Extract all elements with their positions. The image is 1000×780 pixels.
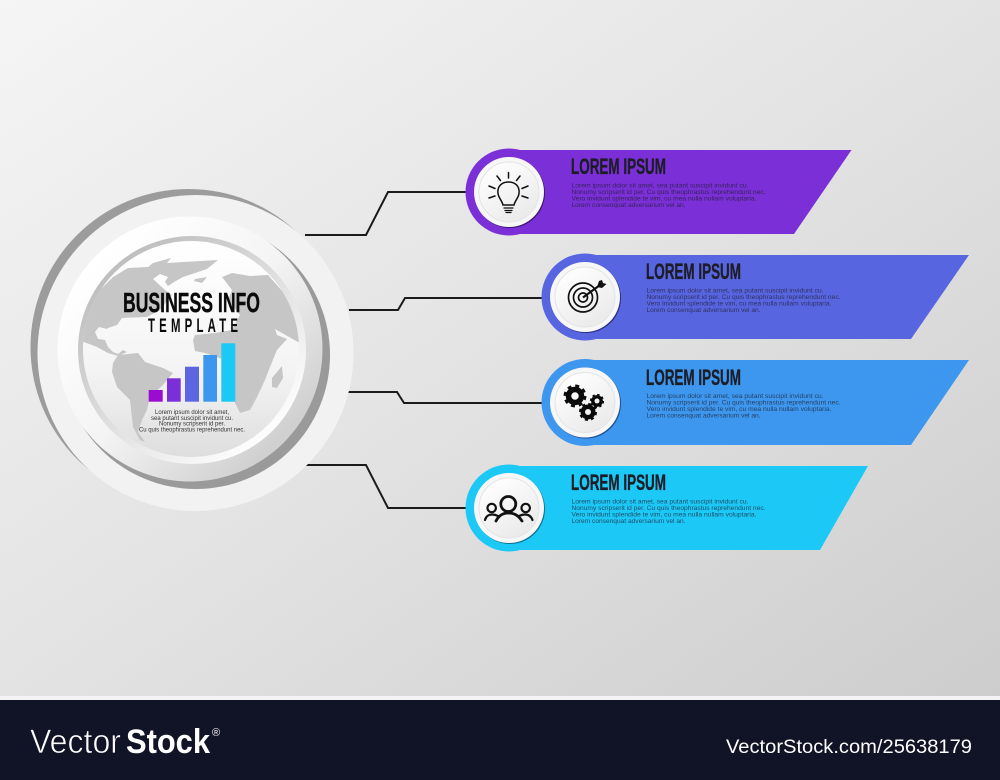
heading: business info: BUSINESS INFO — [123, 287, 260, 318]
globe description text: Lorem ipsum dolor sit amet, — [155, 409, 229, 416]
text block — [646, 288, 841, 314]
text block: Nonumy scripserit id per. Cu quis theophrastus reprehendunt nec. — [572, 189, 766, 196]
footer id: VectorStock.com/25638179 — [726, 737, 972, 758]
central globe badge — [30, 189, 354, 511]
panel: purple banner — [466, 148, 852, 236]
text block: Lorem consenquat adversarium vel an. — [572, 202, 686, 209]
text block: Nonumy scripserit id per. Cu quis theophrastus reprehendunt nec. — [646, 400, 841, 406]
text block — [572, 498, 766, 525]
text block: Vero invidunt splendide te vim, cu mea nulla nullam voluptaria. — [572, 196, 757, 202]
text block: Lorem consenquat adversarium vel an. — [646, 307, 761, 314]
heading: LOREM IPSUM — [571, 470, 666, 495]
logo: VectorStock — [30, 723, 220, 761]
text block — [572, 182, 766, 209]
heading: LOREM IPSUM — [646, 365, 741, 390]
text block: Lorem ipsum dolor sit amet, sea putant suscipit invidunt cu. — [572, 498, 749, 506]
icon: target — [568, 280, 606, 312]
logo: VectorStock: ® — [212, 727, 220, 739]
world map — [70, 258, 305, 442]
heading: LOREM IPSUM — [646, 259, 741, 284]
text block: Vero invidunt splendide te vim, cu mea nulla nullam voluptaria. — [646, 406, 832, 413]
logo: VectorStock: Stock — [126, 723, 210, 761]
globe description text: Cu quis theophrastus reprehendunt nec. — [139, 426, 245, 433]
icon: light bulb — [489, 172, 528, 212]
text block: Nonumy scripserit id per. Cu quis theophrastus reprehendunt nec. — [646, 294, 841, 301]
logo: VectorStock: Vector — [30, 723, 121, 761]
bar chart — [149, 343, 235, 402]
text block: Lorem consenquat adversarium vel an. — [646, 412, 761, 420]
text block: Vero invidunt splendide te vim, cu mea nulla nullam voluptaria. — [646, 300, 832, 308]
panel: cyan banner — [466, 464, 868, 552]
heading: LOREM IPSUM — [571, 154, 666, 179]
text block: Lorem ipsum dolor sit amet, sea putant suscipit invidunt cu. — [572, 182, 749, 190]
text block: Lorem ipsum dolor sit amet, sea putant suscipit invidunt cu. — [646, 288, 824, 294]
text block: Lorem consenquat adversarium vel an. — [572, 518, 686, 525]
text block: Nonumy scripserit id per. Cu quis theophrastus reprehendunt nec. — [572, 505, 766, 512]
footer bar — [0, 696, 1000, 780]
icon: gears — [565, 386, 603, 420]
panel: blue banner — [542, 359, 969, 446]
panel: indigo banner — [542, 254, 969, 340]
icon: people — [485, 496, 532, 521]
globe description text: Nonumy scripserit id per. — [159, 421, 225, 428]
heading: template: TEMPLATE — [148, 316, 238, 337]
text block: Lorem ipsum dolor sit amet, sea putant suscipit invidunt cu. — [646, 393, 824, 400]
text block: Vero invidunt splendide te vim, cu mea nulla nullam voluptaria. — [572, 512, 757, 518]
globe description text — [139, 409, 245, 433]
connector lines — [305, 192, 542, 508]
globe description text: sea putant suscipit invidunt cu. — [151, 415, 233, 422]
text block — [646, 393, 841, 420]
